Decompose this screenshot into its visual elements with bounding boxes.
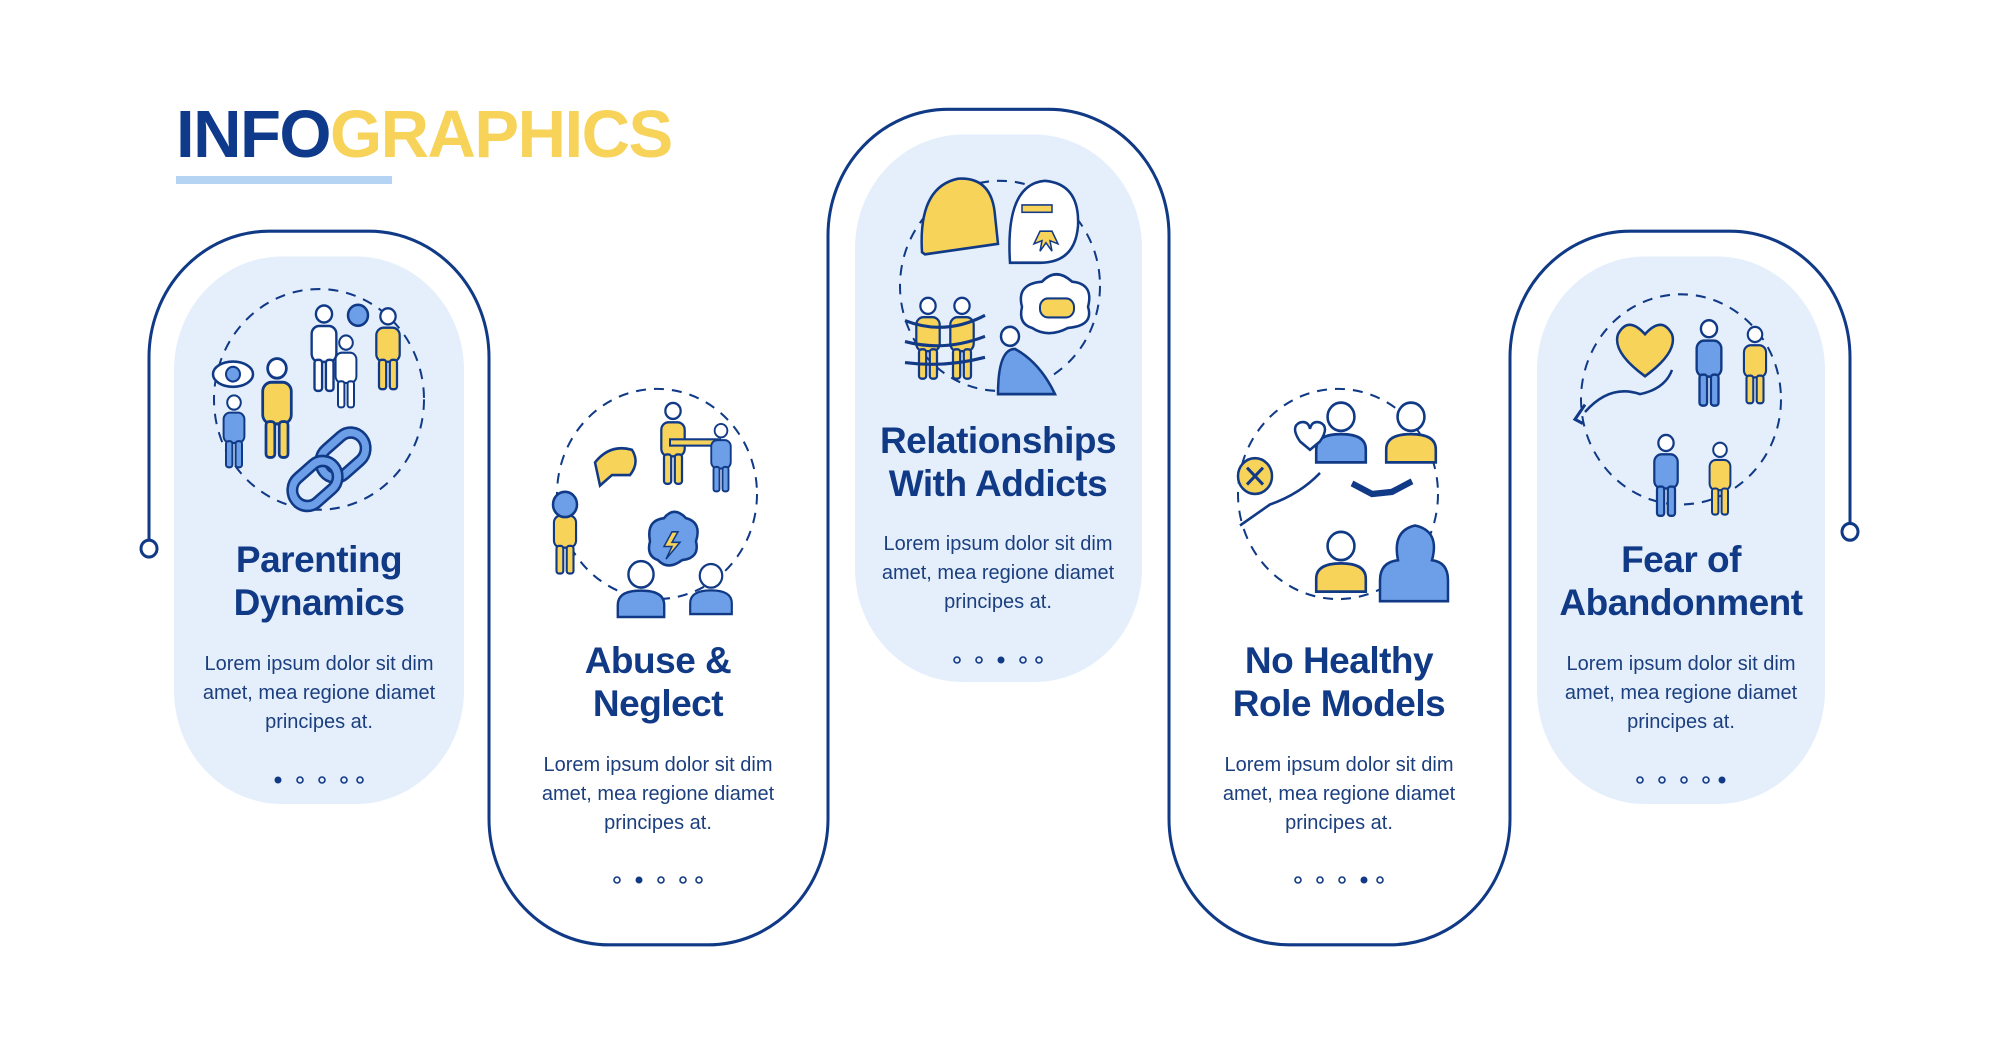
icon: no healthy role models [1238,389,1448,601]
connecting outline [149,109,1850,945]
card 4: no healthy role models [1223,640,1456,884]
heading: No Healthy [1245,640,1433,681]
icon: fear of abandonment [1575,294,1781,516]
text block: principes at. [265,711,373,733]
start node [141,540,157,557]
card 5: fear of abandonment [1559,539,1803,784]
heading: With Addicts [889,463,1107,504]
panel fill: parenting dynamics [174,256,464,804]
heading [234,539,404,623]
text block [1565,653,1798,733]
heading: Fear of [1621,539,1741,580]
text block: amet, mea regione diamet [542,783,774,805]
heading [1233,640,1445,724]
heading [1559,539,1803,623]
text block: Lorem ipsum dolor sit dim [1225,754,1453,776]
heading: Abandonment [1559,582,1803,623]
text block: Lorem ipsum dolor sit dim [1567,653,1795,675]
panel fill: relationships with addicts [855,135,1142,682]
end node [1842,523,1858,540]
heading: Neglect [593,683,723,724]
text block: amet, mea regione diamet [203,682,435,704]
title: INFOGRAPHICS [176,97,672,172]
icon: parenting dynamics [213,289,424,512]
icon: abuse and neglect [553,389,757,617]
text block: principes at. [1285,812,1393,834]
pager dots [1636,776,1726,784]
text block: Lorem ipsum dolor sit dim [544,754,772,776]
text block: amet, mea regione diamet [1223,783,1455,805]
text block: amet, mea regione diamet [1565,682,1797,704]
text block [882,533,1114,613]
pager dots [274,776,364,784]
pager dots [1294,876,1384,884]
heading: Dynamics [234,582,404,623]
title underline [176,176,392,184]
pager dots [953,656,1043,664]
pager dots [613,876,703,884]
heading: Relationships [880,420,1116,461]
heading [880,420,1116,504]
text block: principes at. [944,591,1052,613]
card 2: abuse & neglect [542,640,774,884]
text block: amet, mea regione diamet [882,562,1114,584]
card 1: parenting dynamics [203,539,436,784]
text block: Lorem ipsum dolor sit dim [884,533,1112,555]
panel fill: fear of abandonment [1537,256,1825,804]
text block: Lorem ipsum dolor sit dim [205,653,433,675]
icon: relationships with addicts [900,179,1100,394]
text block [1223,754,1456,834]
heading: Role Models [1233,683,1445,724]
text block: principes at. [604,812,712,834]
card 3: relationships with addicts [880,420,1116,664]
heading: Parenting [236,539,402,580]
heading [585,640,731,724]
text block: principes at. [1627,711,1735,733]
text block [542,754,774,834]
heading: Abuse & [585,640,731,681]
text block [203,653,436,733]
